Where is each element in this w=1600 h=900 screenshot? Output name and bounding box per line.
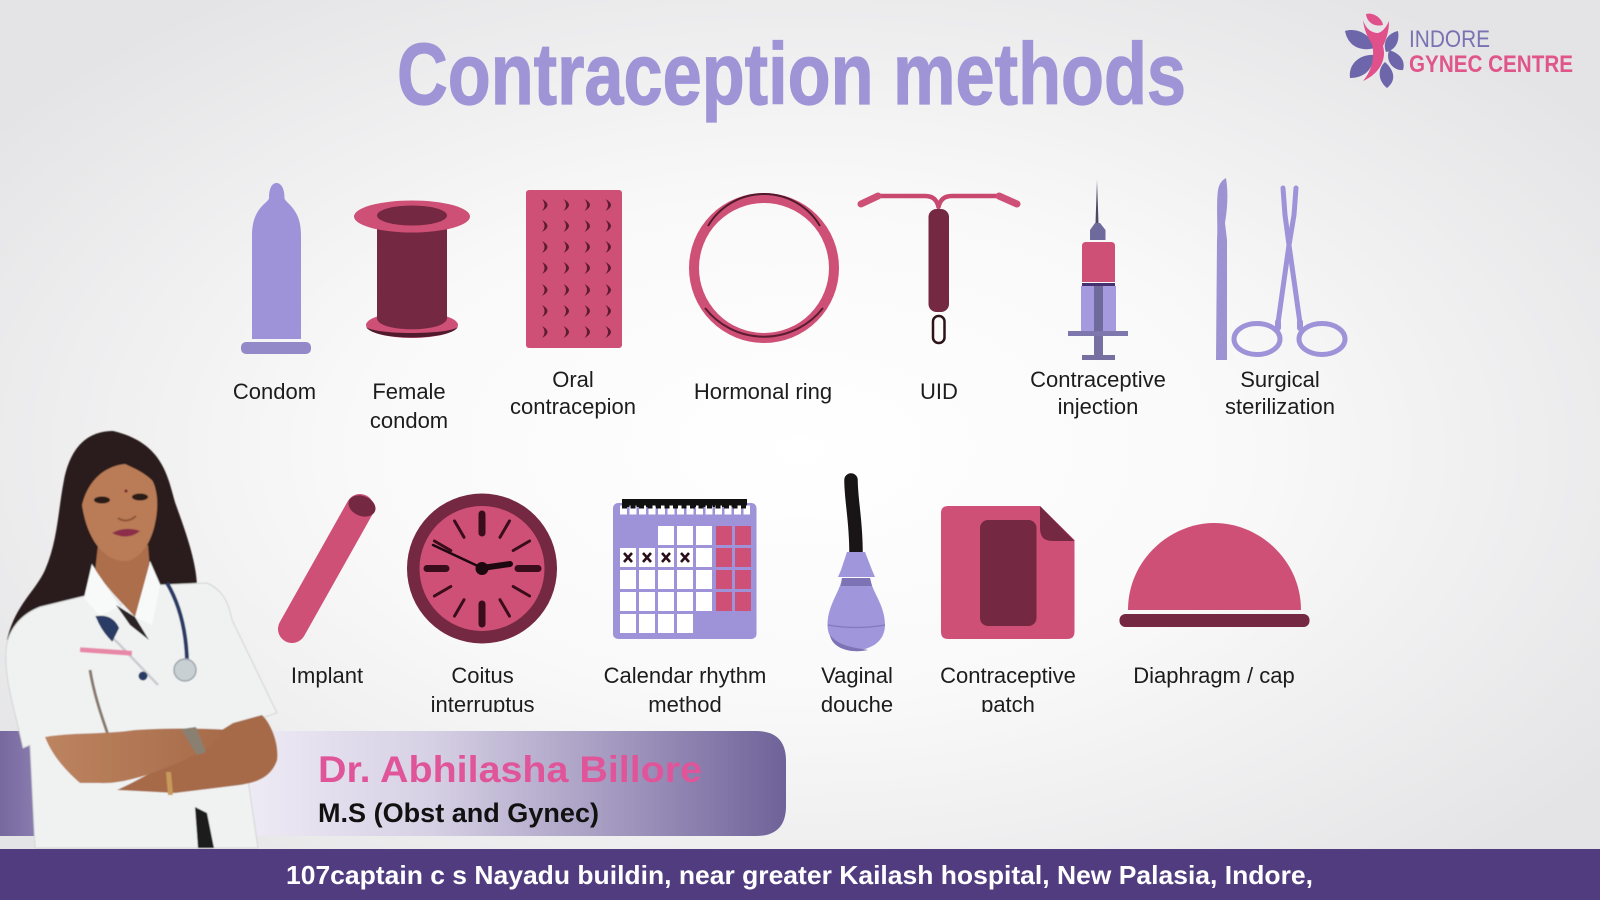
icon: oral contraceptive pill pack <box>526 190 622 348</box>
icon: butterfly petals <box>1345 30 1404 88</box>
icon: calendar <box>613 503 756 639</box>
label: Vaginal douche: douche <box>821 692 893 717</box>
icon: IUD <box>861 196 1017 343</box>
label: Diaphragm / cap: Diaphragm / cap <box>1133 663 1295 688</box>
coat collar <box>84 562 160 625</box>
calendar pink days <box>716 526 751 611</box>
icon: surgical tools <box>1216 178 1345 360</box>
footer bar <box>0 849 1600 900</box>
label: Calendar rhythm method <box>604 667 765 712</box>
watch <box>181 727 206 755</box>
stethoscope <box>96 583 196 685</box>
icon: contraceptive patch <box>941 506 1074 639</box>
doctor name: Dr. Abhilasha Billore <box>318 749 702 790</box>
label: Coitus interruptus: Coitus <box>451 663 514 688</box>
label: UID: UID <box>920 379 958 404</box>
label: Contraceptive patch: patch <box>981 692 1035 717</box>
label: Contraceptive injection <box>1030 367 1166 419</box>
label: Oral contraception <box>510 367 636 419</box>
neck <box>95 545 150 617</box>
label: Vaginal douche: Vaginal <box>821 663 893 688</box>
sleeve seam <box>90 670 108 735</box>
name band <box>0 731 786 836</box>
badge name <box>80 647 132 656</box>
label: Female condom <box>370 379 448 433</box>
bracelet <box>166 772 173 795</box>
label: Oral contraception: contracepion <box>510 394 636 419</box>
calendar day cells <box>620 526 712 633</box>
label: Female condom: condom <box>370 408 448 433</box>
icon: condom <box>241 183 311 354</box>
facial features <box>94 490 148 537</box>
black top bottom <box>195 807 214 848</box>
logo: Indore Gynec Centre <box>1345 14 1573 88</box>
clock hands <box>433 545 510 568</box>
hair fringe <box>81 431 160 505</box>
arm right <box>117 715 277 793</box>
label: Surgical sterilization <box>1225 367 1335 419</box>
icon: scalpel <box>1216 178 1227 360</box>
label: Coitus interruptus: interruptus <box>431 692 535 717</box>
title: Contraception methods <box>397 26 1186 123</box>
face <box>82 462 157 561</box>
arm left <box>45 728 232 783</box>
label: Contraceptive injection: injection <box>1058 394 1138 419</box>
text: INDORE: INDORE <box>1409 26 1490 53</box>
text: GYNEC CENTRE: GYNEC CENTRE <box>1409 51 1573 78</box>
icon: vaginal douche <box>828 480 885 651</box>
icon: clock <box>407 494 557 644</box>
address: 107captain c s Nayadu buildin, near greater Kailash hospital, New Palasia, Indore, <box>286 860 1313 890</box>
icon: diaphragm <box>1120 523 1310 627</box>
icon: hormonal ring <box>694 194 834 338</box>
calendar crosses <box>624 553 689 562</box>
coat <box>6 562 277 848</box>
icon: female condom <box>354 200 470 338</box>
label: Contraceptive injection: Contraceptive <box>1030 367 1166 392</box>
label: Contraceptive patch <box>941 667 1075 712</box>
calendar binding <box>620 503 750 510</box>
label: Oral contraception: Oral <box>552 367 594 392</box>
label: Female condom: Female <box>372 379 446 404</box>
label: Hormonal ring: Hormonal ring <box>694 379 832 404</box>
label: Coitus interruptus <box>432 667 534 712</box>
label: Surgical sterilization: sterilization <box>1225 394 1335 419</box>
icon: syringe <box>1068 180 1128 360</box>
label: Calendar rhythm method: Calendar rhythm <box>604 663 766 688</box>
doctor portrait <box>6 431 277 848</box>
icon: scissors <box>1234 188 1345 354</box>
icon: pink figure <box>1363 14 1389 81</box>
icon: implant <box>292 491 379 629</box>
label: Condom: Condom <box>233 379 316 404</box>
doctor qualification: M.S (Obst and Gynec) <box>318 798 599 828</box>
label: Implant: Implant <box>291 663 363 688</box>
label: Contraceptive patch: Contraceptive <box>940 663 1076 688</box>
hair <box>7 431 197 640</box>
label: Surgical sterilization: Surgical <box>1240 367 1320 392</box>
label: Calendar rhythm method: method <box>648 692 722 717</box>
black top <box>116 605 149 640</box>
label: Vaginal douche <box>821 667 892 712</box>
